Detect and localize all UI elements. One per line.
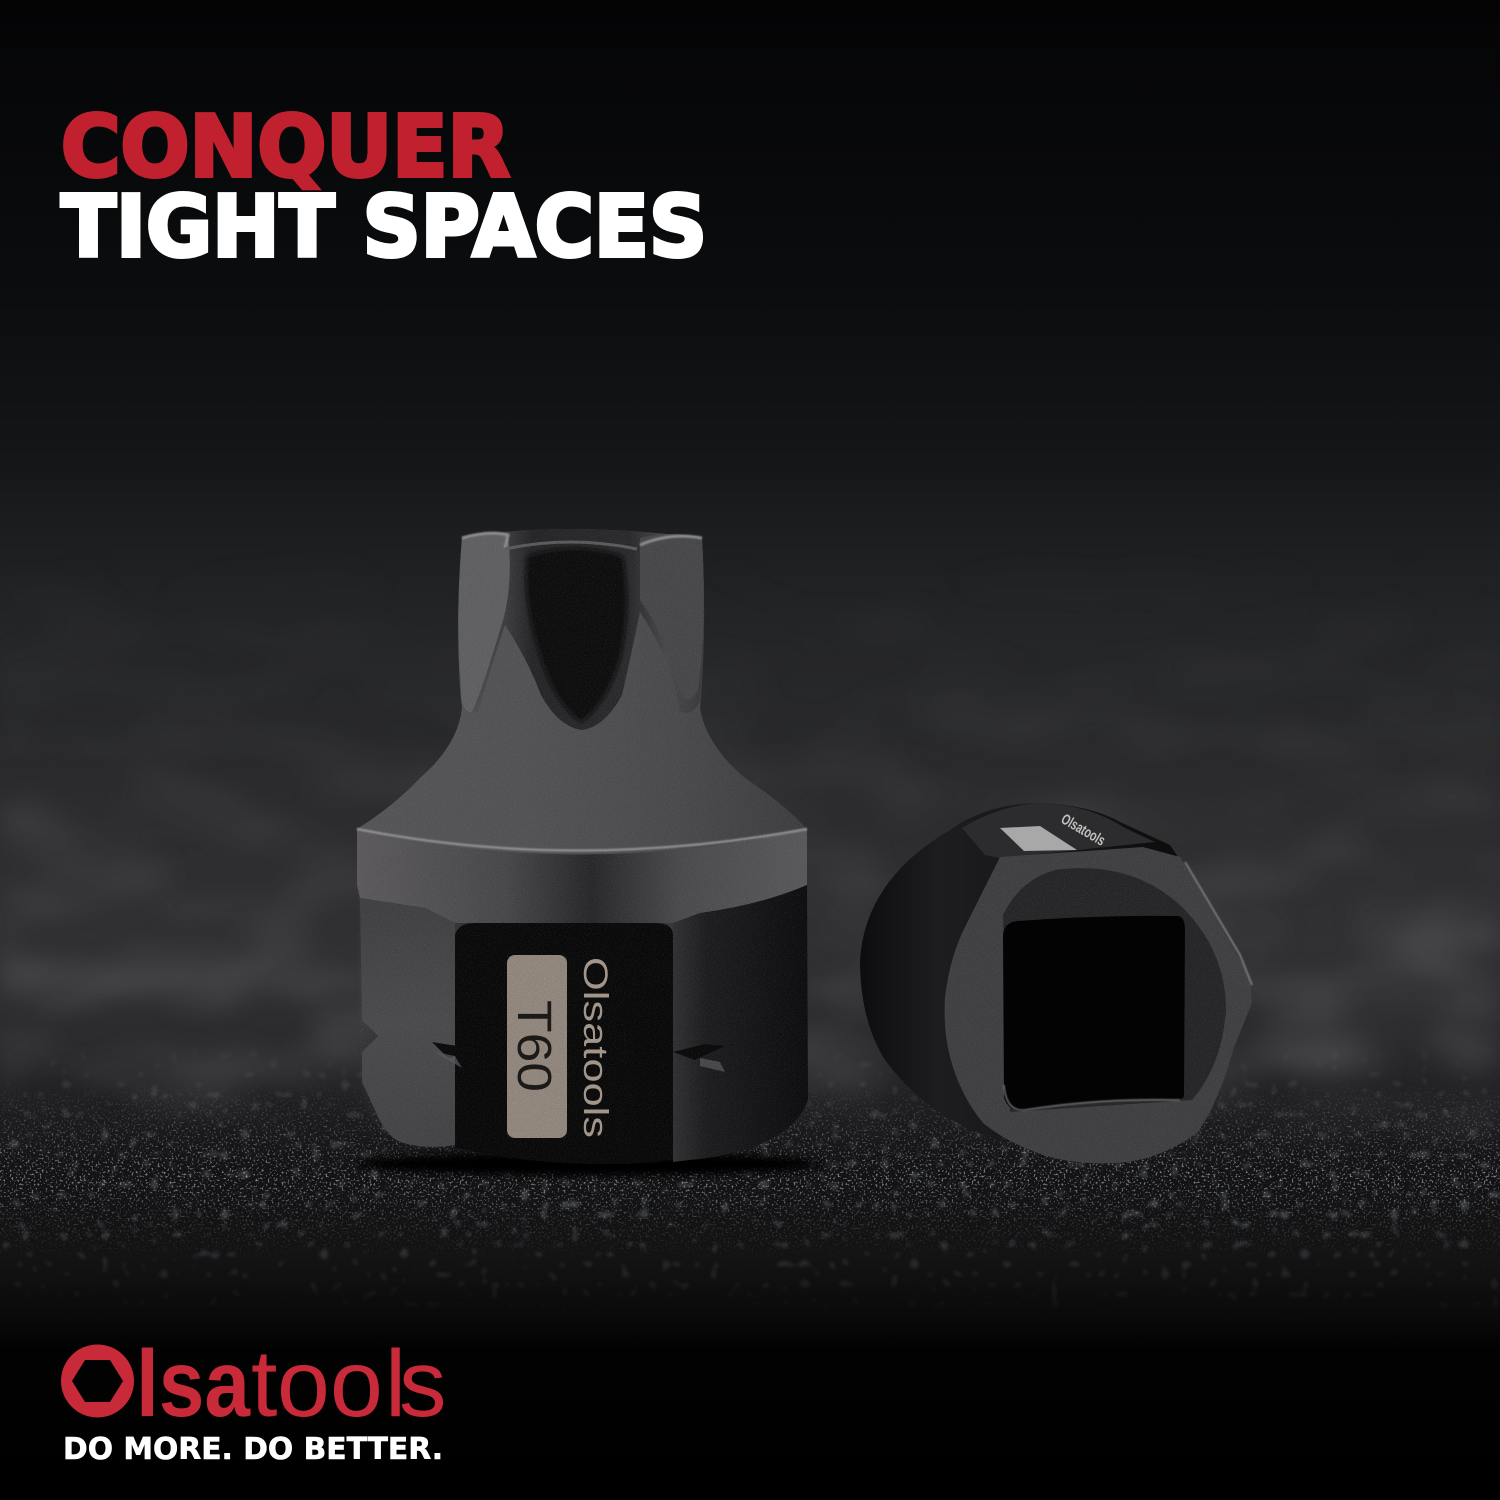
logo wordmark bold: lsa: [136, 1331, 251, 1437]
top band with engraving: [962, 803, 1155, 858]
surface grain: [357, 530, 809, 1170]
haze: cloudy out-of-focus backdrop: [1, 780, 1496, 1124]
engraved brand: Olsatools: [576, 957, 614, 1138]
square drive hole: [1003, 916, 1185, 1111]
torx tip and flared collar: [357, 529, 807, 865]
front hex face: [945, 847, 1252, 1163]
headline: [61, 98, 707, 277]
logo wordmark light: tools: [251, 1331, 446, 1437]
socket: lying square-drive end: [860, 803, 1255, 1165]
left flat: [360, 898, 455, 1147]
rear drum: [860, 803, 1180, 1140]
black label face: [455, 923, 673, 1164]
size plate with T60: [507, 955, 567, 1138]
edge highlight: [1185, 862, 1252, 985]
brand logo: [60, 1331, 446, 1467]
top band with engraving: Olsatools: [1058, 811, 1108, 849]
contact shadow: [355, 1152, 825, 1176]
right flat: [673, 885, 808, 1162]
notches: [432, 1042, 725, 1060]
size plate with T60: T60: [507, 1000, 560, 1092]
headline line 1: CONQUER: [61, 98, 510, 197]
socket: standing T60 torx bit: [355, 529, 825, 1176]
face grain: [945, 845, 1255, 1165]
logo hex O: O: [60, 1333, 134, 1435]
floor: in-focus sparkle band: [0, 1080, 1500, 1260]
inner recess: [1003, 868, 1226, 1112]
tagline: DO MORE. DO BETTER.: [63, 1432, 443, 1467]
body band: [357, 829, 807, 923]
floor: out-of-focus bokeh speckle: [3, 1062, 1500, 1296]
rim highlight: [357, 829, 807, 850]
headline line 2: TIGHT SPACES: [61, 178, 707, 277]
